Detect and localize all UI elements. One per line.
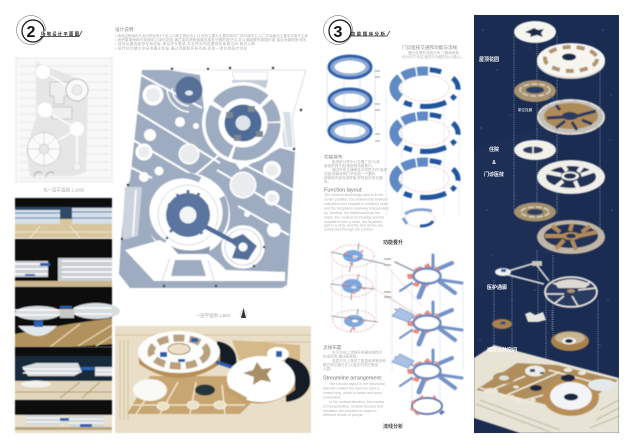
roof garden small disc [514, 21, 556, 43]
streamline text: of transportation, vertical elevator and [323, 404, 383, 408]
podium pieces [492, 312, 589, 351]
function layout text: part is a circle and the two circles are [324, 224, 383, 228]
function stack: large segmented rings [386, 70, 459, 227]
architectural disc tan 1 [514, 80, 558, 103]
label: inpatient and outpatient: & [492, 160, 496, 166]
left parking strip [122, 187, 142, 240]
top small ring [412, 398, 442, 414]
design description text: • 医疗综合楼主体采用圆形体量,通过连廊联系各功能,形成一体化的医疗空间 [115, 46, 247, 50]
label: inpatient and outpatient [484, 146, 504, 178]
function layout text: The medical technology area is in the [324, 193, 384, 197]
lower left rotunda [146, 173, 230, 257]
function layout text: and the hospital is relatively independent [324, 206, 389, 210]
white top strip over tower [168, 70, 212, 128]
diagonal white paths [130, 75, 293, 235]
tan plaza [127, 376, 252, 414]
streamline text: The circular layout in the horizontal [329, 382, 385, 386]
section header: site plan: 2 [26, 24, 36, 41]
outpatient traffic description: 设计中门诊区,医技与功能的出入核心。 [402, 54, 464, 59]
site outline [172, 70, 306, 150]
model photo 3 [15, 287, 120, 347]
caption: ground floor plan: 一层平面图 1:800 [196, 313, 231, 319]
streamline text: 流线布置: [323, 344, 343, 351]
streamline text: Streamline arrangement: [323, 376, 382, 382]
section header: functional analysis [324, 16, 390, 44]
dashed alignment lines [494, 36, 603, 375]
design description text: • 病房楼南面和东南面设立绿化花园,通过南北两侧道路连接各分期的医疗区,并以道路联系周围环境,保证病患就医流线 [115, 37, 306, 42]
function layout text: by "landing" the traditional long line [324, 211, 380, 215]
small circulation diagrams [331, 243, 422, 332]
label: inpatient and outpatient: 门诊医技 [484, 171, 504, 178]
label: inpatient and outpatient: 住院 [489, 146, 499, 153]
section header: site plan [16, 16, 82, 44]
streamline text: 水平方向上流线采用横向线性环 [332, 350, 383, 354]
design description text: 设计说明: [115, 26, 135, 33]
right rotunda disc [227, 380, 295, 404]
function layout text: 房依附其外围,使医院功能集约。 [324, 163, 375, 168]
streamline text: 竖直方向上提供了垂直电梯等多种 [332, 358, 386, 363]
top level partial ring [403, 209, 435, 227]
function layout text: connected through the corridor. [324, 228, 374, 232]
tan disc large lower [537, 220, 605, 254]
inpatient white disc small [514, 140, 556, 160]
site model base [474, 345, 619, 433]
caption: streamline analysis: 流线分析 [383, 423, 403, 430]
design description text [115, 26, 308, 50]
inpatient white disc large [537, 160, 605, 194]
main ground floor plan [119, 67, 306, 288]
function layout text: 使病房内部自成院落,获得良好采光通 [324, 175, 383, 180]
design description text: • 场地由西南向东北分别设有4个出入口和主院区出入口 西向主要为主要的城市广场与城市主入口,东南面设立集中式医疗主体 [115, 33, 308, 38]
section header: functional analysis: 功能循序分析 [351, 30, 386, 37]
streamline text: escalator are provided to adapt to [323, 409, 377, 413]
model photo 5 [15, 400, 112, 433]
outpatient traffic description: 通过合理的流线分布,了解病房和 [408, 50, 460, 55]
icon: north arrow [240, 308, 247, 318]
function layout text: 风。 [324, 180, 331, 184]
function layout text: mass, the medical technology and the [324, 216, 384, 220]
tan disc small lower [514, 202, 556, 222]
function layout text: 功能排布: [324, 154, 344, 160]
entrance markers [121, 67, 302, 287]
lower rotunda south arc [171, 246, 210, 257]
section header: site plan: 场地设计平面图 [41, 30, 80, 37]
function layout text: 通过环形交通串连不同层次的“病房” [332, 167, 389, 172]
top left dark tower and arcs [167, 88, 189, 112]
model photo 4 [15, 347, 112, 400]
section header: functional analysis: 3 [334, 24, 342, 41]
streamline text: direction makes the flow line form a [323, 386, 379, 390]
south plaza [125, 240, 285, 281]
streamline text: 人群。 [323, 366, 334, 371]
function layout text: 医技部分居中心位置,门诊与病 [332, 159, 380, 164]
exploded axonometric panel [474, 15, 619, 433]
outpatient traffic description: 门诊医技交通和功能与流线: [402, 44, 458, 51]
label: podium public space: 裙房公共空间 [487, 346, 517, 354]
medical bridge corridor [495, 261, 597, 307]
label: medical corridor: 医护通廊 [487, 284, 507, 291]
caption: function overlay: 功能叠升 [383, 239, 403, 246]
label: roof garden: 屋顶花园 [479, 56, 499, 63]
shadows [217, 341, 237, 368]
design description text: • 场地设置地面停车和地库,满足停车需求,并在停车场设置绿化休憩空间,服务人群 [115, 41, 255, 46]
function layout text: Function layout: [324, 188, 363, 194]
streamline text: In the vertical direction, two modes [329, 400, 385, 404]
caption: basement plan: 负一层平面图 1:1000 [44, 186, 85, 194]
label: elevated level: 架空连廊 [518, 107, 533, 112]
function layout text: center position, the relationship between [324, 198, 388, 202]
round courtyards [136, 84, 281, 237]
aerial model photo [115, 326, 311, 433]
night sky background [474, 15, 619, 433]
function layout text [324, 154, 389, 232]
upper right rotunda [202, 82, 284, 164]
link between rotundas [206, 227, 236, 243]
model photo 2 [15, 239, 112, 287]
pool and small discs [133, 379, 167, 401]
streamline text: convenient. [323, 396, 341, 400]
architectural disc tan 2 [537, 99, 605, 135]
roof garden large disc [537, 43, 605, 79]
function layout text: 花园,使病房和门诊形成一个圆环, [324, 171, 376, 176]
function layout text: outpatient form a circle, the inpatient [324, 220, 382, 224]
large circulation diagrams [392, 255, 463, 416]
small basement site plan [16, 58, 112, 182]
streamline text [323, 344, 386, 417]
outpatient traffic description [402, 44, 464, 59]
plan base shape [119, 70, 295, 288]
streamline text: different needs of people. [323, 413, 364, 417]
function stack: small rings [327, 56, 380, 142]
lower right rotunda [221, 225, 265, 269]
streamline text: 模式和交通方式,以适应不同的使用 [323, 362, 378, 367]
left rotunda disc [139, 355, 220, 378]
model photo 1 [15, 198, 112, 238]
streamline text: closed loop, which is faster and more [323, 391, 382, 395]
function layout text: outpatient and hospital is relatively close [324, 202, 388, 206]
streamline text: 形成回流,通往距离短。 [323, 354, 360, 358]
